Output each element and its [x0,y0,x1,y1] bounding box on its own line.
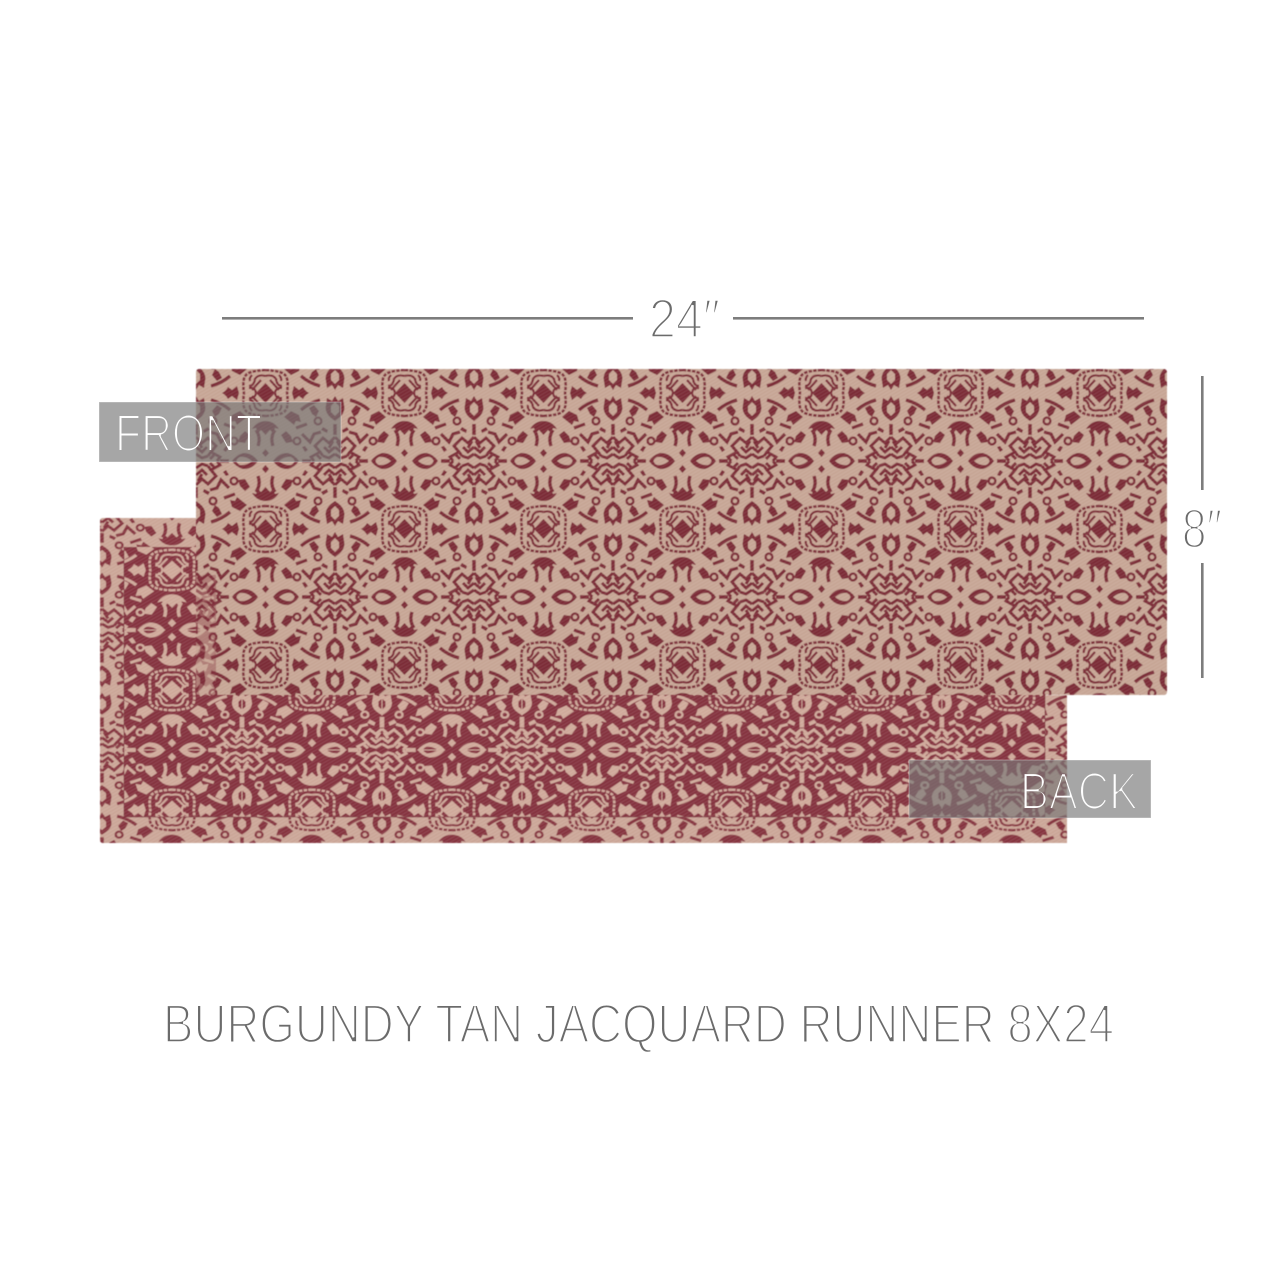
height dimension: 8 inches: 8″ [1182,498,1222,560]
label: back [909,760,1151,821]
width dimension: 24 inches: 24″ [649,288,720,350]
label: front: FRONT [115,405,262,463]
product title: BURGUNDY TAN JACQUARD RUNNER 8X24 [163,992,1114,1054]
runner back side [100,518,1067,843]
label: back: BACK [1020,763,1138,821]
runner front side [196,369,1167,695]
